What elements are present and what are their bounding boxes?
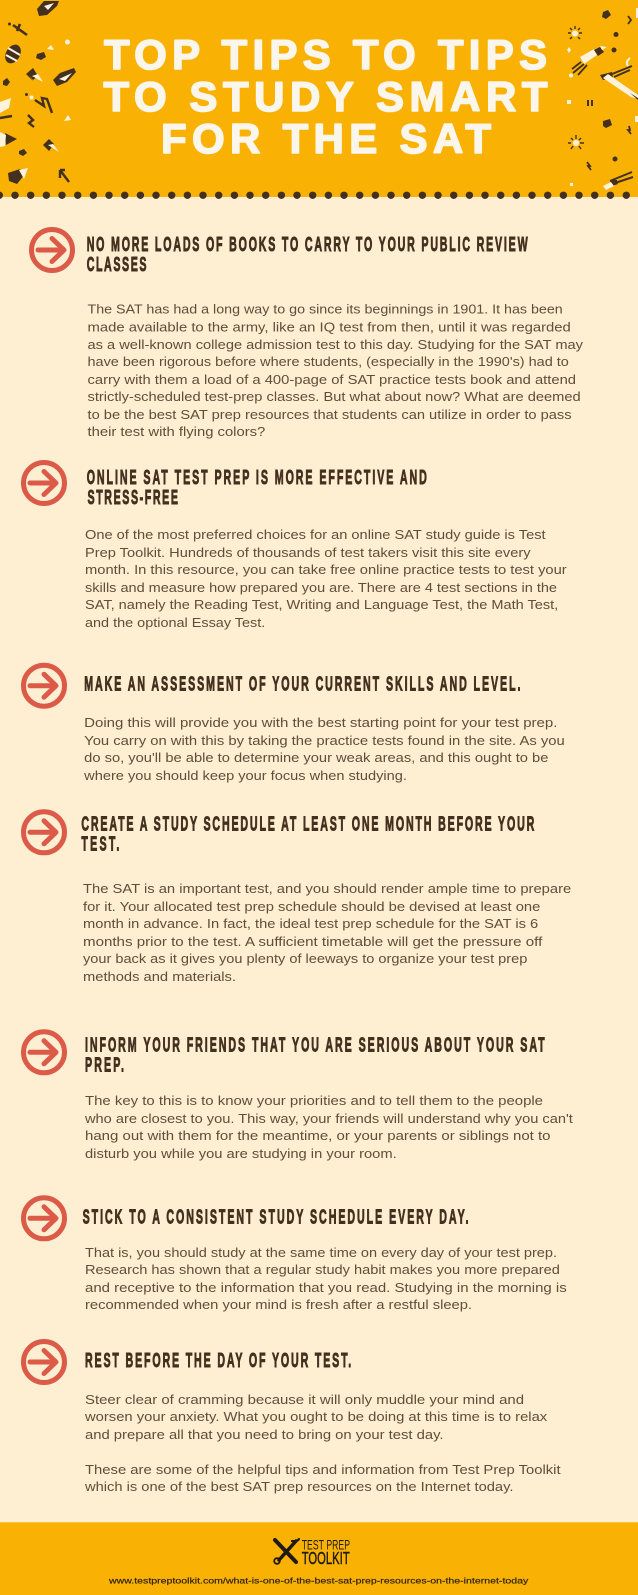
text block: who are closest to you. This way, your friends will understand why you can't — [84, 1111, 573, 1126]
text block — [84, 1392, 561, 1494]
icon: arrow circle — [24, 812, 64, 853]
text block — [83, 715, 565, 783]
panel: section 5 — [24, 1032, 573, 1161]
icon: arrow circle — [24, 462, 64, 504]
text block: which is one of the best SAT prep resources on the Internet today. — [84, 1479, 513, 1494]
text block: Prep Toolkit. Hundreds of thousands of test takers visit this site every — [85, 545, 531, 560]
text block: months prior to the test. A sufficient timetable will get the pressure off — [83, 934, 543, 949]
logo: Test Prep Toolkit: TEST PREP — [302, 1537, 350, 1553]
text block: hang out with them for the meantime, or your parents or siblings not to — [85, 1128, 550, 1143]
icon: arrow circle — [32, 230, 72, 270]
text block: for it. Your allocated test prep schedule should be devised at least one — [83, 899, 540, 914]
text block: to be the best SAT prep resources that students can utilize in order to pass — [88, 407, 572, 422]
icon: right confetti pencils — [567, 8, 638, 190]
text block: Doing this will provide you with the best starting point for your test prep. — [84, 715, 557, 730]
title — [104, 31, 548, 162]
text block — [85, 527, 567, 630]
icon: arrow circle — [24, 1032, 64, 1073]
heading: STICK TO A CONSISTENT STUDY SCHEDULE EVERY DAY. — [83, 1206, 468, 1229]
icon: arrow circle — [24, 665, 64, 706]
heading: CLASSES — [87, 253, 147, 276]
heading — [85, 1034, 545, 1077]
heading — [87, 233, 528, 276]
text block: and the optional Essay Test. — [85, 615, 265, 630]
text block: disturb you while you are studying in your room. — [85, 1146, 397, 1161]
text block: made available to the army, like an IQ test from then, until it was regarded — [88, 319, 571, 334]
icon: arrow circle — [24, 1342, 64, 1382]
text block: recommended when your mind is fresh after a restful sleep. — [85, 1297, 472, 1312]
text block: as a well-known college admission test to this day. Studying for the SAT may — [88, 337, 583, 352]
text block: where you should keep your focus when studying. — [83, 768, 407, 783]
text block — [83, 881, 571, 984]
text block: carry with them a load of a 400-page of SAT practice tests book and attend — [88, 372, 576, 387]
text block: These are some of the helpful tips and information from Test Prep Toolkit — [85, 1462, 561, 1477]
heading: REST BEFORE THE DAY OF YOUR TEST. — [85, 1349, 351, 1372]
heading: STRESS-FREE — [88, 486, 178, 509]
source url: www.testpreptoolkit.com/what-is-one-of-the-best-sat-prep-resources-on-the-internet-today — [108, 1576, 529, 1586]
text block: month in advance. In fact, the ideal test prep schedule for the SAT is 6 — [83, 916, 538, 931]
panel: footer — [0, 1522, 638, 1595]
icon: crossed tools — [274, 1539, 299, 1564]
text block — [88, 301, 583, 439]
heading: ONLINE SAT TEST PREP IS MORE EFFECTIVE AND — [87, 466, 427, 489]
text block: The key to this is to know your priorities and to tell them to the people — [85, 1093, 543, 1108]
text block: and prepare all that you need to bring on your test day. — [85, 1427, 444, 1442]
heading: MAKE AN ASSESSMENT OF YOUR CURRENT SKILLS AND LEVEL. — [84, 673, 520, 696]
panel: section 3 — [24, 665, 565, 783]
heading: NO MORE LOADS OF BOOKS TO CARRY TO YOUR PUBLIC REVIEW — [87, 233, 528, 256]
text block: The SAT is an important test, and you should render ample time to prepare — [83, 881, 571, 896]
panel: header banner — [0, 0, 638, 199]
text block: do so, you'll be able to determine your weak areas, and this ought to be — [84, 750, 548, 765]
text block: The SAT has had a long way to go since its beginnings in 1901. It has been — [88, 301, 563, 316]
icon: left confetti pencils — [0, 1, 76, 184]
title: TOP TIPS TO TIPS — [104, 31, 547, 78]
heading: PREP. — [85, 1054, 124, 1077]
text block — [85, 1245, 567, 1312]
text block: One of the most preferred choices for an online SAT study guide is Test — [85, 527, 546, 542]
text block: You carry on with this by taking the practice tests found in the site. As you — [84, 733, 565, 748]
heading: CREATE A STUDY SCHEDULE AT LEAST ONE MONTH BEFORE YOUR — [81, 813, 534, 836]
text block: Research has shown that a regular study habit makes you more prepared — [85, 1262, 560, 1277]
logo: Test Prep Toolkit — [274, 1537, 350, 1569]
text block: have been rigorous before where students, (especially in the 1990's) had to — [88, 354, 569, 369]
panel: section 1 — [32, 230, 583, 439]
panel: section 4 — [24, 812, 571, 984]
title: FOR THE SAT — [161, 115, 491, 162]
panel: section 6 — [24, 1198, 567, 1312]
text block — [84, 1093, 573, 1161]
panel: section 2 — [24, 462, 567, 630]
heading: INFORM YOUR FRIENDS THAT YOU ARE SERIOUS ABOUT YOUR SAT — [85, 1034, 545, 1057]
heading — [87, 466, 427, 509]
text block: Steer clear of cramming because it will only muddle your mind and — [85, 1392, 524, 1407]
heading: TEST. — [81, 833, 119, 856]
icon: arrow circle — [24, 1198, 64, 1239]
text block: month. In this resource, you can take free online practice tests to test your — [85, 562, 567, 577]
title: TO STUDY SMART — [104, 73, 548, 120]
text block: their test with flying colors? — [88, 424, 265, 439]
dotted border — [0, 192, 630, 199]
text block: worsen your anxiety. What you ought to be doing at this time is to relax — [84, 1409, 548, 1424]
text block: and receptive to the information that you read. Studying in the morning is — [85, 1280, 567, 1295]
panel: section 7 — [24, 1342, 561, 1494]
text block: strictly-scheduled test-prep classes. But what about now? What are deemed — [88, 389, 581, 404]
logo: Test Prep Toolkit: TOOLKIT — [302, 1550, 350, 1569]
text block: SAT, namely the Reading Test, Writing and Language Test, the Math Test, — [85, 597, 558, 612]
text block: That is, you should study at the same time on every day of your test prep. — [85, 1245, 557, 1260]
text block: skills and measure how prepared you are. There are 4 test sections in the — [85, 580, 557, 595]
text block: your back as it gives you plenty of leeways to organize your test prep — [83, 951, 527, 966]
heading — [81, 813, 534, 856]
text block: methods and materials. — [83, 969, 236, 984]
